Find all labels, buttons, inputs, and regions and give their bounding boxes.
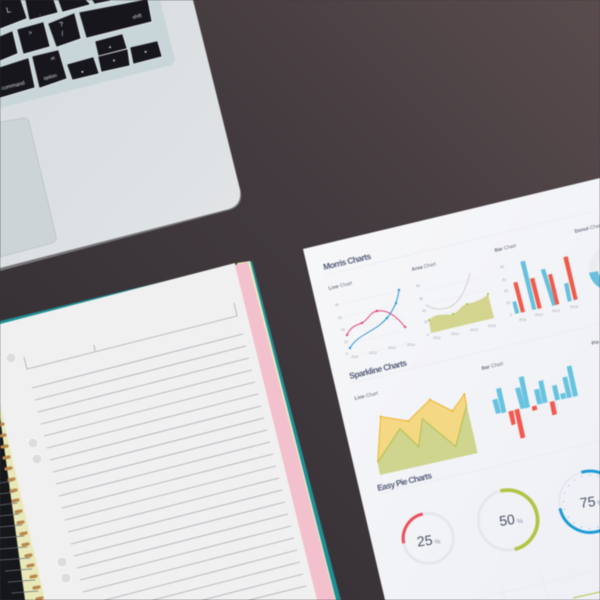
copper wire highlights [0,424,42,599]
trackpad [0,118,56,257]
laptop body edge [0,0,241,271]
sub-chart labels: Line Chart [328,280,353,292]
key labels: ◄ [80,69,84,74]
axis labels: 2014 [570,305,578,309]
axis labels: 2013 [470,328,478,332]
negative red bars [508,401,557,439]
laptop top surface [0,0,240,268]
sparkline line chart [378,393,478,475]
axis labels: 20 [422,309,426,313]
sheet of paper [303,178,600,600]
axis labels: 2012 [535,313,543,317]
blue bars [512,261,572,314]
line chart [335,289,415,359]
notebook [0,261,341,600]
axis labels: 40 [416,284,420,288]
key labels: L [5,5,12,15]
green series line [378,405,467,462]
keyboard keys [0,0,161,97]
grid lines [342,291,411,356]
heading: Morris Charts: Morris Charts [322,251,372,272]
key labels: option [43,73,58,82]
axis labels [500,265,578,322]
axis labels: 30 [419,297,423,301]
spiral backing [0,417,27,600]
red bars [513,256,578,313]
pie: 50 percent [478,490,538,550]
key labels: ? [59,21,64,29]
sub-chart labels: Line Chart [354,390,379,402]
area points [428,293,489,321]
axis labels: 40 [500,265,504,269]
page stack [237,261,336,600]
axis labels: 2013 [388,346,396,350]
cropped lime chart line at the bottom edge [573,592,600,598]
heading: Sparkline Charts: Sparkline Charts [348,357,408,381]
bar chart [500,256,578,322]
axis labels [335,303,415,359]
yellow page strip [0,405,48,600]
pie: 50 percent: 50 % [498,510,524,529]
sub-chart labels: Bar Chart [494,243,517,254]
key labels: / [61,31,64,38]
heading: Easy Pie Charts: Easy Pie Charts [376,470,433,493]
axis labels: 2014 [488,324,496,328]
axis labels [416,284,496,340]
axis labels: 30 [338,316,342,320]
axis labels: 2012 [451,332,459,336]
donut chart, cropped at the edge [593,250,600,286]
key labels: ▼ [112,58,116,63]
blue series [350,290,399,348]
pie: 25 percent [403,507,461,571]
axis labels: 2012 [369,351,377,355]
printed chart sheet [303,178,600,600]
pink series [347,311,405,335]
sparkline bar chart [492,365,578,439]
pie: 25 percent: 25 % [416,531,441,550]
olive filled area [429,294,494,333]
ruled lines [24,303,306,600]
donut blue arc [593,272,600,286]
key labels: command [1,80,25,92]
pie: 75 percent [559,471,600,532]
axis labels: 10 [506,301,510,305]
keyboard well [0,0,175,108]
green series area [378,405,478,475]
key labels: alt [50,55,56,61]
yellow series area [378,394,467,462]
laptop [0,0,241,271]
axis labels: 2014 [407,343,415,347]
axis labels: 20 [341,328,345,332]
key labels: > [28,30,33,37]
key labels: shift [132,13,143,21]
area chart [416,273,496,340]
axis labels: 2011 [433,336,441,340]
donut track [593,250,600,286]
axis labels: 2011 [519,318,527,322]
dark wire loops [0,481,38,593]
notebook cover edge [0,261,341,600]
key labels: ▲ [108,44,112,49]
axis labels: 0 [510,313,512,317]
key labels: ► [144,49,148,54]
axis labels: 10 [424,320,428,324]
axis labels: 2013 [552,309,560,313]
grid lines [423,278,490,318]
axis labels: 40 [335,303,339,307]
easy pie charts [403,471,600,571]
key labels [1,5,148,92]
data points [346,289,406,349]
axis labels: 10 [344,340,348,344]
sparkline points [379,393,465,422]
punched holes [6,353,71,583]
axis labels: 20 [504,289,508,293]
key labels: : [39,14,42,20]
pink page edge [235,262,335,600]
sub-chart labels: Bar Chart [481,361,504,372]
axis labels: 0 [427,333,429,337]
positive blue bars [492,365,578,414]
axis labels: 0 [346,352,348,356]
sub-chart labels: Area Chart [411,261,437,273]
axis labels: 30 [502,278,506,282]
sub-chart labels [328,222,600,402]
white page [0,263,317,600]
gray series [426,273,470,309]
spiral binding [0,424,42,599]
section divider lines [325,212,600,600]
axis labels: 2011 [351,355,359,359]
